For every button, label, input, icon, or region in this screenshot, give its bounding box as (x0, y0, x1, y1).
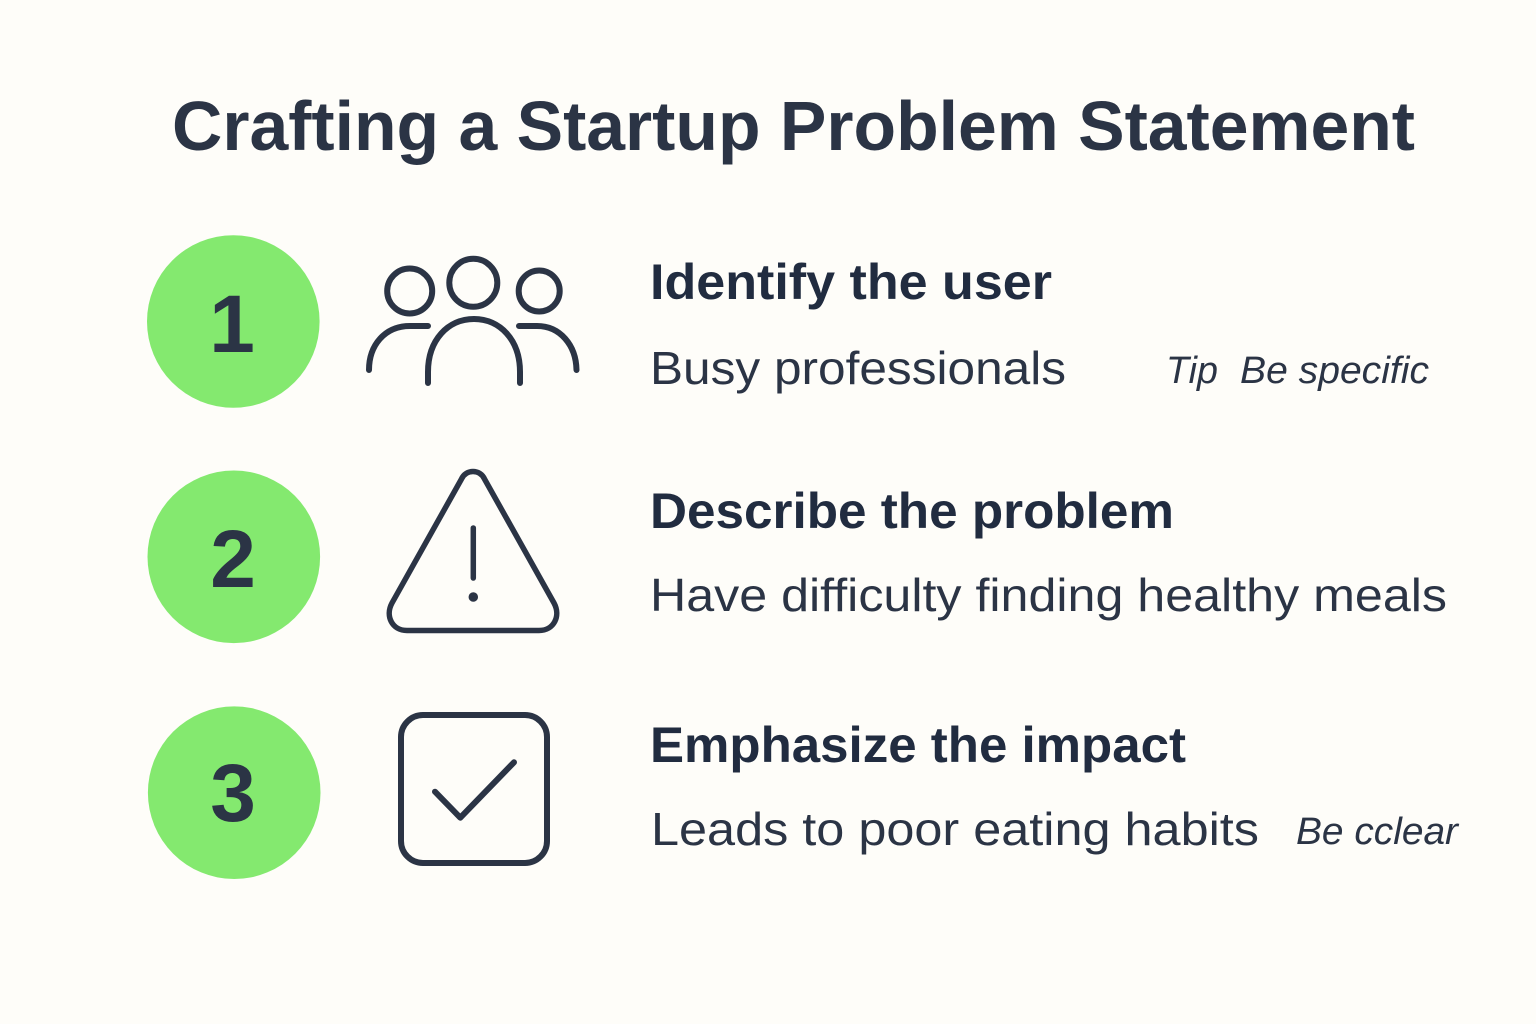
text: busy professionals: Busy professionals (650, 342, 1066, 394)
icon: checkbox (401, 715, 547, 863)
heading: describe the problem: Describe the problem (650, 483, 1174, 539)
number badge 3 (148, 706, 320, 879)
step 2 (148, 470, 1447, 643)
text: leads to poor eating habits: Leads to poor eating habits (651, 803, 1259, 855)
icon: users (369, 259, 576, 383)
number badge 1 (147, 235, 320, 408)
step 1 (147, 235, 1429, 408)
tip: label and advice: Tip (1166, 350, 1218, 392)
number badge 2 (148, 470, 320, 643)
number badge 3: 3 (210, 748, 256, 839)
number badge 2: 2 (210, 514, 256, 605)
heading: identify the user: Identify the user (650, 254, 1052, 310)
step 3 (148, 706, 1459, 879)
number badge 1: 1 (209, 279, 255, 370)
text: have difficulty finding healthy meals: Have difficulty finding healthy meals (650, 569, 1447, 621)
tip: label and advice (1166, 350, 1429, 392)
tip: be cclear: Be cclear (1296, 811, 1459, 853)
heading: emphasize the impact: Emphasize the impact (650, 717, 1186, 773)
tip: label and advice: Be specific (1240, 350, 1429, 392)
title: Crafting a Startup Problem Statement (172, 87, 1415, 165)
icon: warning triangle (389, 472, 557, 630)
